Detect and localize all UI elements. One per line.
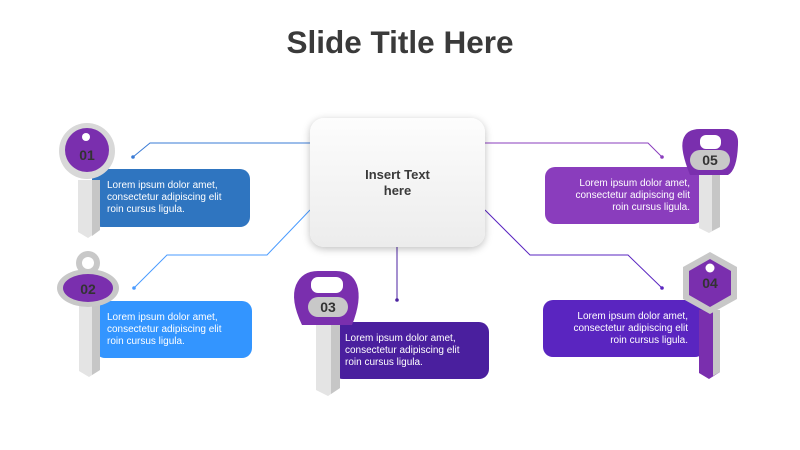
key 01: 01 — [79, 147, 95, 163]
title: Slide Title Here — [286, 24, 514, 60]
key 04 — [683, 252, 737, 379]
box 01 — [92, 169, 250, 227]
key 02: 02 — [80, 281, 96, 297]
box 01: consectetur adipiscing elit — [107, 192, 222, 203]
center box: here — [384, 182, 411, 198]
box 03: roin cursus ligula. — [345, 357, 423, 368]
key 05: 05 — [702, 152, 718, 168]
box 02: consectetur adipiscing elit — [107, 324, 222, 335]
box 03: Lorem ipsum dolor amet, — [345, 333, 456, 344]
box 04 — [543, 300, 705, 357]
box 05 — [545, 167, 703, 224]
box 02: Lorem ipsum dolor amet, — [107, 312, 218, 323]
key 03: 03 — [320, 299, 336, 315]
box 02: roin cursus ligula. — [107, 336, 185, 347]
box 01: roin cursus ligula. — [107, 204, 185, 215]
box 05: roin cursus ligula. — [612, 202, 690, 213]
key 05 — [682, 129, 738, 233]
key 02 — [57, 251, 119, 377]
box 05: consectetur adipiscing elit — [575, 190, 690, 201]
center box: Insert Text — [365, 166, 430, 182]
box 04: Lorem ipsum dolor amet, — [577, 311, 688, 322]
box 04: roin cursus ligula. — [610, 335, 688, 346]
center box — [310, 118, 485, 247]
box 03: consectetur adipiscing elit — [345, 345, 460, 356]
box 05: Lorem ipsum dolor amet, — [579, 178, 690, 189]
key 01 — [59, 123, 115, 238]
box 04: consectetur adipiscing elit — [573, 323, 688, 334]
key 04: 04 — [702, 275, 718, 291]
box 03 — [333, 322, 489, 379]
box 01: Lorem ipsum dolor amet, — [107, 180, 218, 191]
box 02 — [95, 301, 252, 358]
key 03 — [294, 271, 359, 396]
